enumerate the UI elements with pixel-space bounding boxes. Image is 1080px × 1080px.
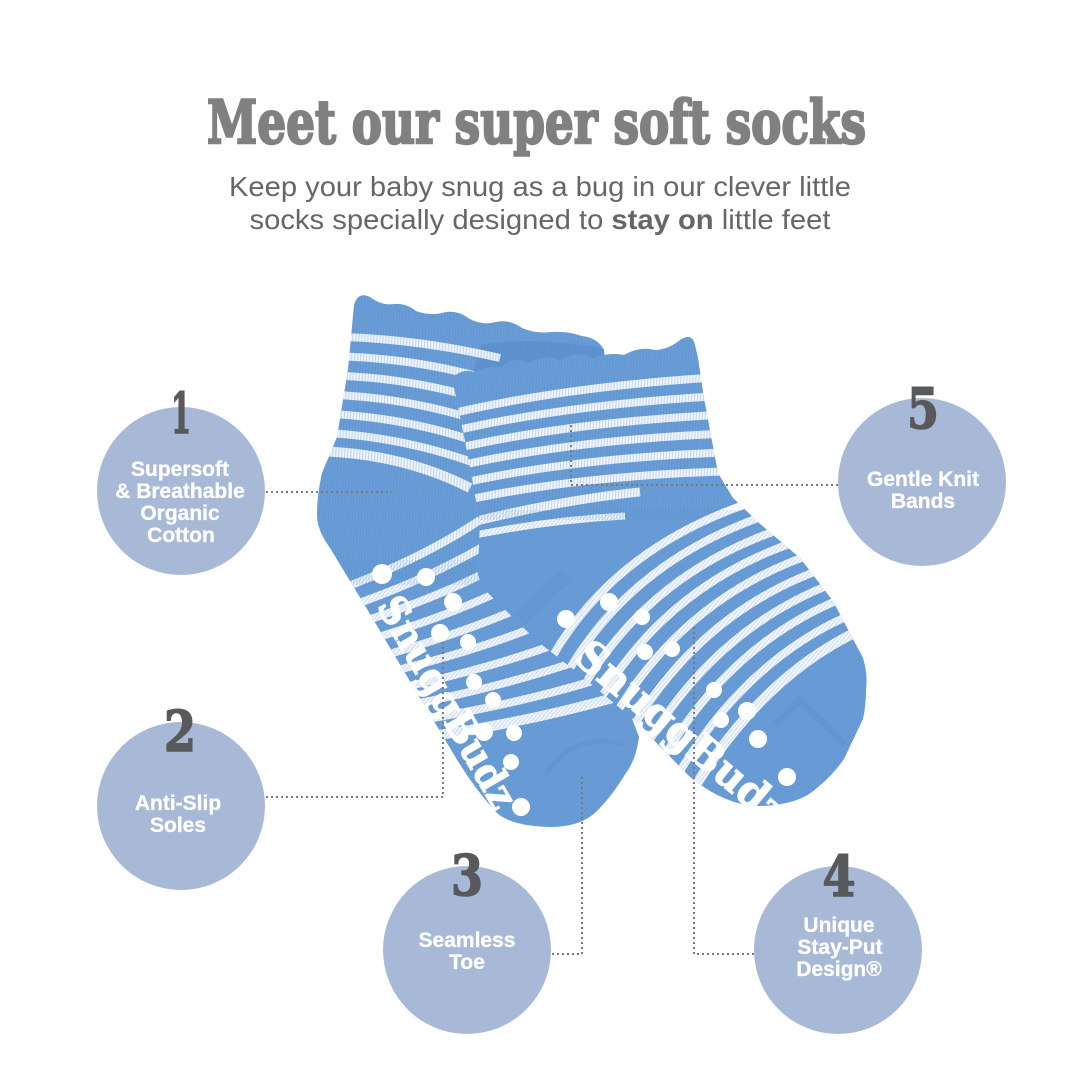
callout 3: toe: 3	[451, 843, 483, 909]
connector 2	[266, 641, 443, 797]
left sock grips	[372, 564, 530, 816]
subtitle: socks specially designed to stay on little feet	[250, 204, 831, 235]
callout 5: bands: Gentle Knit	[867, 468, 979, 491]
callout 4: design: 4	[822, 844, 856, 910]
callout 1: cotton: Organic	[140, 502, 220, 525]
callout 5: bands: Bands	[891, 490, 955, 513]
foot stripes	[550, 502, 853, 786]
callout 2: soles: Anti-Slip	[135, 792, 221, 815]
connector 4	[694, 625, 754, 954]
callout 1: cotton: 1	[171, 381, 191, 447]
callout 3: toe: Seamless	[419, 929, 515, 952]
callout 2: soles: 2	[164, 699, 196, 765]
toe shading	[775, 700, 845, 745]
callout 2: soles: Soles	[150, 814, 206, 837]
callout 3: toe	[383, 843, 551, 1034]
right sock logo: SnuggBudz	[566, 630, 798, 836]
callout 2: soles	[97, 699, 265, 890]
callout 3: toe: Toe	[449, 951, 485, 974]
product photo: pair of striped socks	[317, 295, 867, 827]
left sock logo: SnuggBudz	[367, 588, 527, 817]
callout 1: cotton: Supersoft	[131, 458, 229, 481]
subtitle	[229, 171, 851, 235]
inner cuff shadow	[474, 341, 604, 372]
right sock grips	[557, 593, 796, 786]
callout 1: cotton: Cotton	[147, 524, 215, 547]
callout 4: design: Design®	[796, 958, 882, 981]
foot stripes	[335, 520, 620, 737]
right sock	[454, 337, 867, 806]
heel shading	[520, 575, 568, 620]
callout 1: cotton	[97, 381, 265, 575]
connector 3	[552, 775, 582, 954]
connector 1	[266, 491, 392, 493]
left sock	[317, 295, 639, 827]
callout 5: bands: 5	[907, 376, 939, 442]
subtitle: Keep your baby snug as a bug in our clever little	[229, 171, 851, 202]
callout 4: design: Unique	[803, 914, 875, 937]
callout 4: design	[754, 844, 922, 1034]
connector 5	[571, 423, 838, 485]
title: Meet our super soft socks	[207, 88, 866, 158]
callout 1: cotton: & Breathable	[115, 480, 245, 503]
callout 5: bands	[838, 376, 1006, 566]
toe shading	[545, 741, 625, 775]
callout 4: design: Stay-Put	[797, 936, 883, 959]
